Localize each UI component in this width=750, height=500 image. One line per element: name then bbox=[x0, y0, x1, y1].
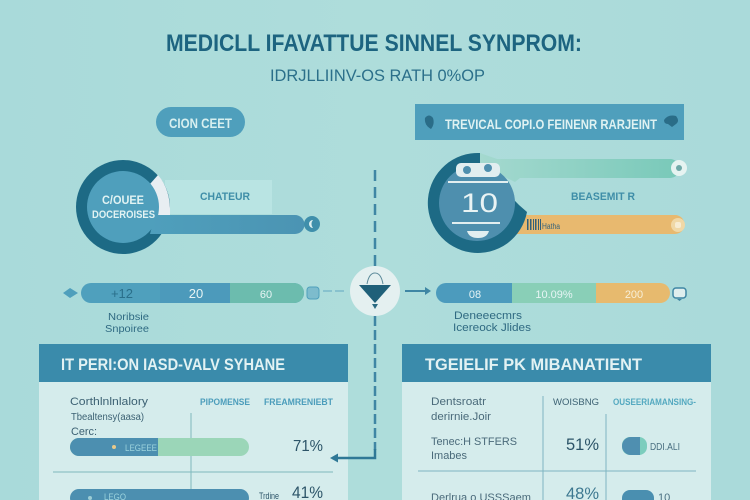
icon: screen bbox=[673, 288, 686, 301]
segmented bar: right bbox=[436, 283, 686, 303]
header banner: right: TREVICAL COPI.O FEINENR RARJEINT bbox=[445, 116, 657, 132]
panel heading bbox=[39, 344, 348, 382]
segmented bar: right: 10.09% bbox=[535, 289, 573, 301]
panel heading bbox=[402, 344, 711, 382]
barcode label bbox=[527, 219, 560, 231]
dividers bbox=[418, 396, 696, 500]
row labels: Corthlnlnlalory bbox=[70, 396, 149, 408]
row labels: Cerc: bbox=[71, 426, 97, 438]
pill: row 1 bbox=[622, 437, 680, 455]
icon: diamond bbox=[63, 288, 78, 298]
pill: row 2 bbox=[622, 490, 670, 500]
subtitle: IDRJLLIINV-OS RATH 0%OP bbox=[270, 66, 485, 85]
orange bar end icon bbox=[671, 218, 685, 232]
values bbox=[566, 435, 599, 500]
barcode label: Hatha bbox=[542, 222, 560, 231]
green bar end icon bbox=[671, 160, 687, 176]
segmented bar: left: 20 bbox=[189, 286, 203, 301]
row labels: Dentsroatr bbox=[431, 396, 486, 408]
caption: left bar: Noribsie bbox=[108, 312, 149, 323]
value: row 1: 71% bbox=[293, 438, 323, 455]
segmented bar: left bbox=[63, 283, 319, 303]
panel: left table bbox=[39, 344, 348, 500]
label panel: chateur: CHATEUR bbox=[200, 191, 250, 203]
ring label bbox=[92, 193, 155, 221]
title: MEDICLL IFAVATTUE SINNEL SYNPROM: bbox=[166, 30, 582, 57]
horizontal bar bbox=[150, 215, 304, 234]
row labels bbox=[70, 396, 149, 438]
caption: BEASEMIT R bbox=[571, 191, 635, 203]
gauge: left circle and bar bbox=[76, 160, 320, 254]
segmented bar: right: 08 bbox=[469, 289, 481, 301]
dashes to center bbox=[323, 290, 345, 292]
column headings: OUSEERIAMANSING- bbox=[613, 397, 696, 408]
panel heading: TGEIELIF PK MIBANATIENT bbox=[425, 355, 643, 374]
column headings bbox=[553, 397, 696, 408]
bar: row 1: LEGEEE bbox=[125, 443, 157, 453]
row labels: Tbealtensy(aasa) bbox=[71, 412, 144, 423]
row labels: Tenec:H STFERS bbox=[431, 436, 517, 448]
segmented bar: right: 200 bbox=[625, 289, 643, 301]
ring bbox=[76, 160, 170, 254]
value: row 2 bbox=[259, 483, 323, 500]
segmented bar: left: 60 bbox=[260, 289, 272, 301]
bar end icon bbox=[304, 216, 320, 232]
caption: right bar: Deneeecmrs bbox=[454, 310, 523, 322]
caption: right bar: Icereock Jlides bbox=[453, 322, 532, 334]
ring label: C/OUEE bbox=[102, 193, 144, 207]
caption: left bar: Snpoiree bbox=[105, 324, 149, 335]
ring figure: 10 bbox=[461, 188, 498, 218]
pill: row 1: DDI.ALI bbox=[650, 442, 680, 453]
dividers bbox=[53, 413, 333, 489]
panel: right table bbox=[402, 344, 711, 500]
column headings: PIPOMENSE bbox=[200, 397, 250, 408]
row labels bbox=[431, 396, 531, 500]
column headings bbox=[200, 397, 333, 408]
segmented bar: left: +12 bbox=[111, 286, 133, 301]
header banner: right bbox=[415, 104, 684, 140]
ring label: DOCEROISES bbox=[92, 209, 155, 221]
label panel: chateur bbox=[165, 180, 272, 214]
ring figure bbox=[448, 163, 508, 238]
orange bar bbox=[515, 215, 685, 234]
row labels: Imabes bbox=[431, 450, 467, 462]
gauge: right circle and bars bbox=[428, 153, 687, 253]
bar: row 2 bbox=[70, 489, 249, 500]
ring bbox=[428, 153, 527, 253]
pill heading: left bbox=[156, 107, 245, 137]
arrow to right bar bbox=[405, 287, 431, 295]
bar: row 1 bbox=[70, 438, 249, 456]
connector arrow to left panel bbox=[330, 316, 375, 462]
green bar bbox=[480, 153, 680, 182]
icon: left head bbox=[425, 116, 434, 129]
center icon: circle with funnel bbox=[350, 266, 400, 316]
caption: left bar bbox=[105, 312, 149, 335]
icon: right head bbox=[664, 116, 678, 127]
row labels: derirnie.Joir bbox=[431, 411, 491, 423]
icon: end box bbox=[307, 287, 319, 299]
pill heading: left: CION CEET bbox=[169, 115, 232, 131]
values: 51% bbox=[566, 435, 599, 454]
column headings: WOISBNG bbox=[553, 397, 599, 408]
center dashed connector bbox=[374, 170, 376, 266]
panel heading: IT PERI:ON IASD-VALV SYHANE bbox=[61, 355, 285, 374]
column headings: FREAMRENIEBT bbox=[264, 397, 333, 408]
caption: right bar bbox=[453, 310, 532, 334]
